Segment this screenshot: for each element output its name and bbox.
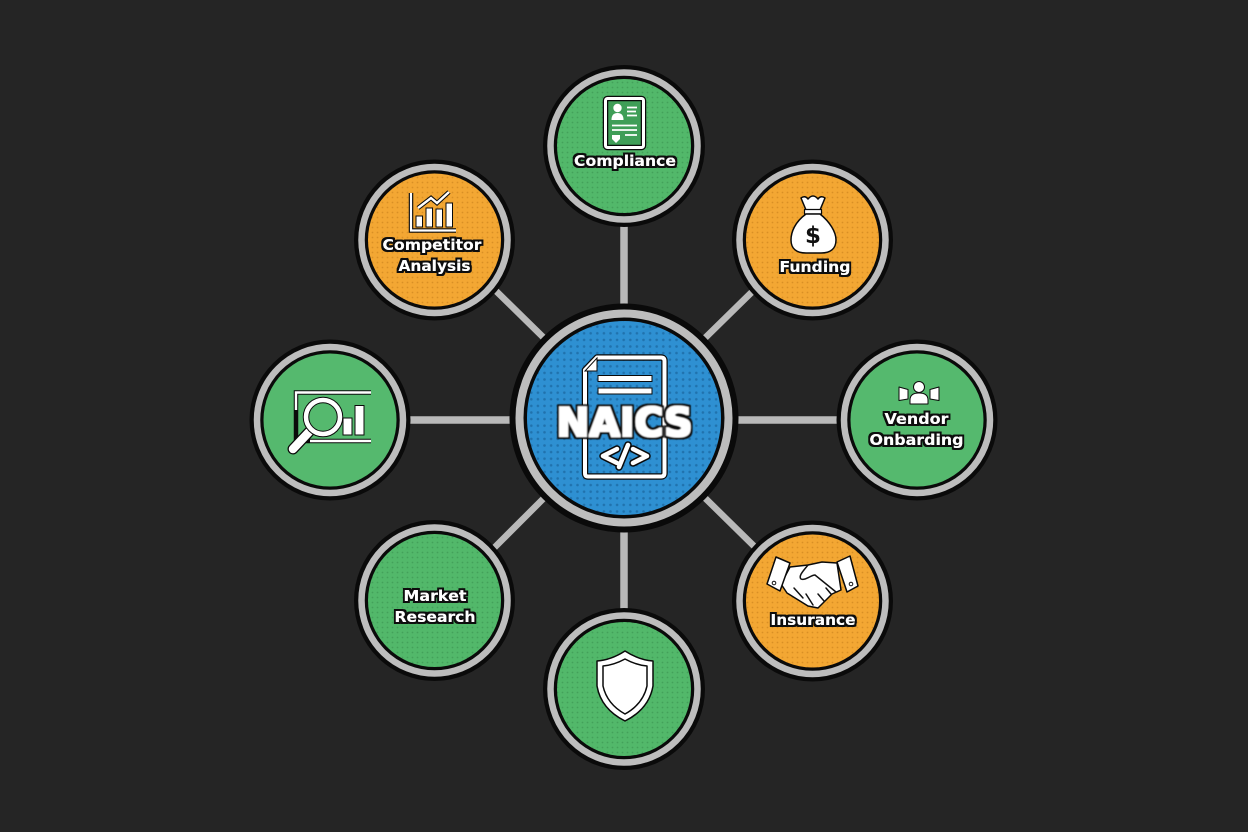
connector lines (404, 220, 842, 614)
node: Insurance (732, 520, 893, 682)
node: Compliance (543, 65, 705, 227)
label: Market Research: Market (404, 587, 466, 605)
label: Market Research: Research (394, 608, 476, 626)
node: Competitor Analysis (354, 160, 515, 320)
icon: bar chart with trend line (411, 192, 456, 230)
icon: money bag: $ (805, 223, 821, 249)
icon: money bag (791, 196, 836, 253)
label: Market Research (394, 587, 476, 626)
label: Funding: Funding (780, 258, 850, 276)
title: NAICS: NAICS (556, 401, 692, 446)
icon: compliance document (606, 98, 644, 148)
node: shield (543, 608, 705, 770)
hub: NAICS (510, 304, 738, 532)
node: Vendor Onbarding (836, 340, 998, 500)
label: Vendor Onbarding: Onbarding (870, 431, 964, 449)
label: Insurance: Insurance (770, 611, 856, 629)
label: Vendor Onbarding: Vendor (884, 410, 949, 428)
icon: shield (597, 651, 653, 721)
node: Funding (732, 160, 893, 320)
icon: magnifier over chart (293, 392, 371, 449)
node: Market Research (354, 520, 515, 681)
label: Competitor Analysis (382, 236, 482, 275)
label: Compliance: Compliance (574, 152, 676, 170)
icon: vendor person (899, 382, 939, 404)
label: Vendor Onbarding (870, 410, 964, 449)
node: market analysis icon (250, 340, 410, 500)
icon: handshake (767, 556, 858, 608)
label: Competitor Analysis: Analysis (398, 257, 471, 275)
icon: code document (585, 358, 664, 476)
label: Competitor Analysis: Competitor (382, 236, 482, 254)
